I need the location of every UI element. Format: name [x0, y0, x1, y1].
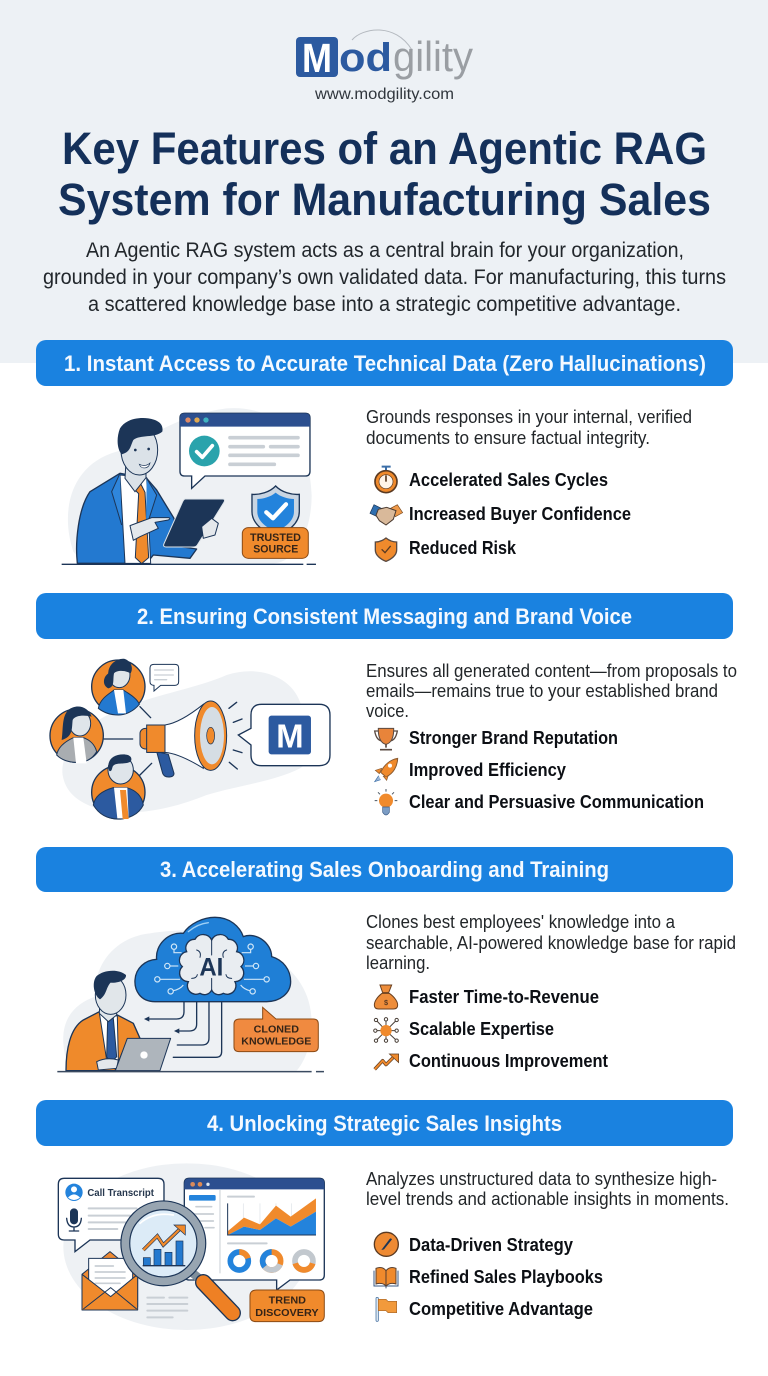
logo — [296, 30, 473, 81]
logo: M — [302, 35, 332, 81]
section 2 heading — [36, 593, 733, 639]
logo: gility — [393, 33, 473, 80]
logo: od — [339, 36, 392, 80]
section 1 description — [366, 407, 692, 448]
panel: section 4 insights — [36, 1100, 733, 1330]
benefit: faster time-to-revenue: Faster Time-to-Revenue — [409, 986, 599, 1007]
benefit: stronger brand reputation: Stronger Brand Reputation — [409, 727, 618, 748]
panel: section 3 onboarding — [36, 847, 736, 1072]
section 1 heading — [36, 340, 733, 386]
illustration: team and megaphone with brand mark: M — [276, 719, 304, 756]
illustration: transcript, dashboard and magnifier — [58, 1163, 324, 1330]
illustration: consultant with tablet and trusted source badge: TRUSTED — [250, 532, 301, 544]
section 4 heading: 4. Unlocking Strategic Sales Insights — [207, 1111, 562, 1136]
section 3 description: learning. — [366, 953, 430, 973]
benefit: scalable expertise — [374, 1018, 554, 1042]
section 4 heading — [36, 1100, 733, 1146]
panel: section 1 technical data — [36, 340, 733, 564]
section 4 description: Analyzes unstructured data to synthesize high- — [366, 1169, 717, 1189]
benefit: data-driven strategy: Data-Driven Strategy — [409, 1234, 574, 1255]
section 3 description — [366, 912, 736, 973]
benefit: improved efficiency: Improved Efficiency — [409, 759, 567, 780]
illustration: consultant with tablet and trusted source badge: SOURCE — [253, 544, 298, 556]
illustration: transcript, dashboard and magnifier: Call Transcript — [87, 1188, 155, 1199]
intro paragraph: An Agentic RAG system acts as a central brain for your organization, — [86, 239, 684, 262]
benefit: faster time-to-revenue: $ — [384, 998, 388, 1007]
benefit: competitive advantage — [376, 1297, 593, 1321]
benefit: clear and persuasive communication: Clear and Persuasive Communication — [409, 791, 704, 812]
section 3 heading — [36, 847, 733, 892]
illustration: employee, AI cloud and cloned knowledge tag: CLONED — [254, 1025, 299, 1036]
section 1 heading: 1. Instant Access to Accurate Technical Data (Zero Hallucinations) — [64, 351, 706, 376]
section 1 description: documents to ensure factual integrity. — [366, 428, 650, 448]
benefit: accelerated sales cycles — [375, 467, 608, 493]
benefit: continuous improvement: Continuous Improvement — [409, 1050, 608, 1071]
benefit: scalable expertise: Scalable Expertise — [409, 1018, 554, 1039]
illustration: transcript, dashboard and magnifier: TREND — [269, 1296, 307, 1307]
section 3 description: searchable, AI-powered knowledge base for rapid — [366, 933, 736, 953]
benefit: reduced risk: Reduced Risk — [409, 537, 517, 558]
benefit: improved efficiency — [375, 758, 567, 782]
illustration: employee, AI cloud and cloned knowledge tag: KNOWLEDGE — [241, 1037, 312, 1048]
benefit: accelerated sales cycles: Accelerated Sales Cycles — [409, 469, 608, 490]
section 2 description: voice. — [366, 701, 409, 721]
intro paragraph: grounded in your company’s own validated data. For manufacturing, this turns — [43, 266, 726, 289]
benefit: faster time-to-revenue — [374, 985, 599, 1009]
illustration: employee, AI cloud and cloned knowledge tag — [57, 917, 324, 1072]
section 2 description: Ensures all generated content—from proposals to — [366, 661, 737, 681]
section 3 description: Clones best employees' knowledge into a — [366, 912, 676, 932]
website url: www.modgility.com — [314, 86, 454, 103]
section 2 description: emails—remains true to your established brand — [366, 681, 718, 701]
illustration: employee, AI cloud and cloned knowledge tag: AI — [199, 954, 223, 981]
intro paragraph — [43, 239, 726, 316]
benefit: data-driven strategy — [374, 1232, 574, 1256]
section 3 heading: 3. Accelerating Sales Onboarding and Training — [160, 857, 609, 882]
benefit: increased buyer confidence: Increased Buyer Confidence — [409, 503, 631, 524]
section 4 description: level trends and actionable insights in moments. — [366, 1189, 729, 1209]
benefit: clear and persuasive communication — [375, 789, 704, 815]
panel: section 2 brand voice — [36, 593, 737, 819]
section 2 description — [366, 661, 737, 721]
benefit: refined sales playbooks: Refined Sales Playbooks — [409, 1266, 603, 1287]
illustration: consultant with tablet and trusted source badge — [62, 408, 316, 564]
illustration: transcript, dashboard and magnifier: DISCOVERY — [255, 1308, 319, 1319]
header background — [0, 0, 768, 363]
intro paragraph: a scattered knowledge base into a strategic competitive advantage. — [88, 293, 681, 316]
title: System for Manufacturing Sales — [58, 174, 711, 225]
benefit: competitive advantage: Competitive Advantage — [409, 1298, 593, 1319]
title: Key Features of an Agentic RAG — [62, 123, 707, 174]
illustration: team and megaphone with brand mark — [50, 659, 330, 819]
section 4 description — [366, 1169, 729, 1209]
title — [58, 123, 711, 225]
section 2 heading: 2. Ensuring Consistent Messaging and Brand Voice — [137, 604, 632, 629]
section 1 description: Grounds responses in your internal, verified — [366, 407, 692, 427]
benefit: reduced risk — [375, 537, 517, 561]
